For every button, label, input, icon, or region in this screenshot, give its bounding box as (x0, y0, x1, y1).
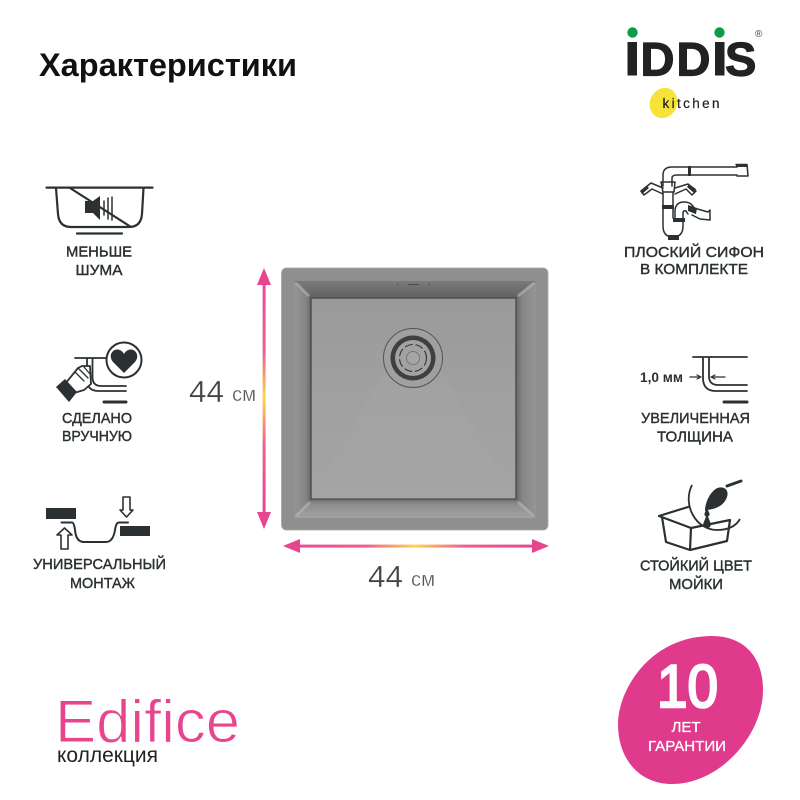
icon: hand and heart (56, 342, 142, 402)
drain (384, 328, 442, 388)
panel: handmade (56, 342, 142, 445)
logo wordmark (628, 32, 756, 86)
floor facets (311, 372, 516, 499)
icon: thickness scheme: 1,0 мм (640, 370, 683, 385)
label: УНИВЕРСАЛЬНЫЙ (33, 555, 166, 573)
logo dot left (627, 27, 638, 38)
label: МОНТАЖ (70, 575, 135, 592)
logo wordmark: D (640, 32, 674, 86)
icon: mounting scheme (46, 497, 150, 549)
sink right wall (516, 281, 536, 518)
collection name: Edifice (55, 688, 240, 755)
arrow: height (257, 268, 271, 529)
sink (282, 268, 548, 530)
label: СТОЙКИЙ ЦВЕТ (640, 556, 752, 574)
dimension: width: см (411, 569, 435, 591)
sink left wall (294, 281, 311, 518)
dimension: height (189, 374, 256, 409)
label: СДЕЛАНО (62, 410, 132, 427)
label: В КОМПЛЕКТЕ (640, 261, 748, 278)
sink rim (282, 268, 548, 530)
label: МОЙКИ (669, 575, 723, 593)
sink bottom wall (294, 499, 536, 518)
sink corners (296, 283, 534, 516)
overflow (397, 284, 431, 286)
logo wordmark: D (676, 32, 710, 86)
badge line: ЛЕТ (672, 719, 700, 736)
panel: universal mounting (33, 497, 166, 592)
dimension: height: 44 (189, 374, 224, 409)
icon: box and brush (659, 481, 741, 550)
badge shape (618, 636, 763, 784)
panel: durable color (640, 481, 752, 593)
sink top wall (294, 281, 536, 298)
dimension: width: 44 (368, 559, 403, 594)
dimension: height: см (232, 384, 256, 406)
warranty badge (618, 636, 763, 784)
panel: thickness (640, 357, 750, 446)
collection caption: коллекция (57, 744, 158, 767)
arrow: width (283, 539, 549, 553)
logo dot right (714, 27, 725, 38)
label: УВЕЛИЧЕННАЯ (641, 410, 750, 427)
panel: less noise (46, 188, 152, 279)
badge line: ГАРАНТИИ (648, 738, 726, 755)
collection (55, 688, 240, 767)
logo: IDDIS kitchen (627, 27, 763, 123)
yellow blob (645, 83, 682, 123)
badge number: 10 (657, 653, 718, 720)
label: ШУМА (76, 262, 122, 279)
icon: siphon (640, 164, 748, 240)
label: ТОЛЩИНА (657, 428, 733, 446)
panel: siphon (624, 164, 764, 278)
logo wordmark: S (725, 32, 756, 86)
registered mark: ® (755, 29, 763, 40)
title: Характеристики (39, 47, 297, 83)
label: МЕНЬШЕ (66, 244, 132, 260)
label: ПЛОСКИЙ СИФОН (624, 243, 764, 261)
dimension: width (368, 559, 435, 594)
kitchen: kitchen (662, 96, 720, 111)
sink floor (311, 298, 516, 499)
label: ВРУЧНУЮ (62, 428, 132, 445)
icon: muted sink (46, 188, 152, 234)
